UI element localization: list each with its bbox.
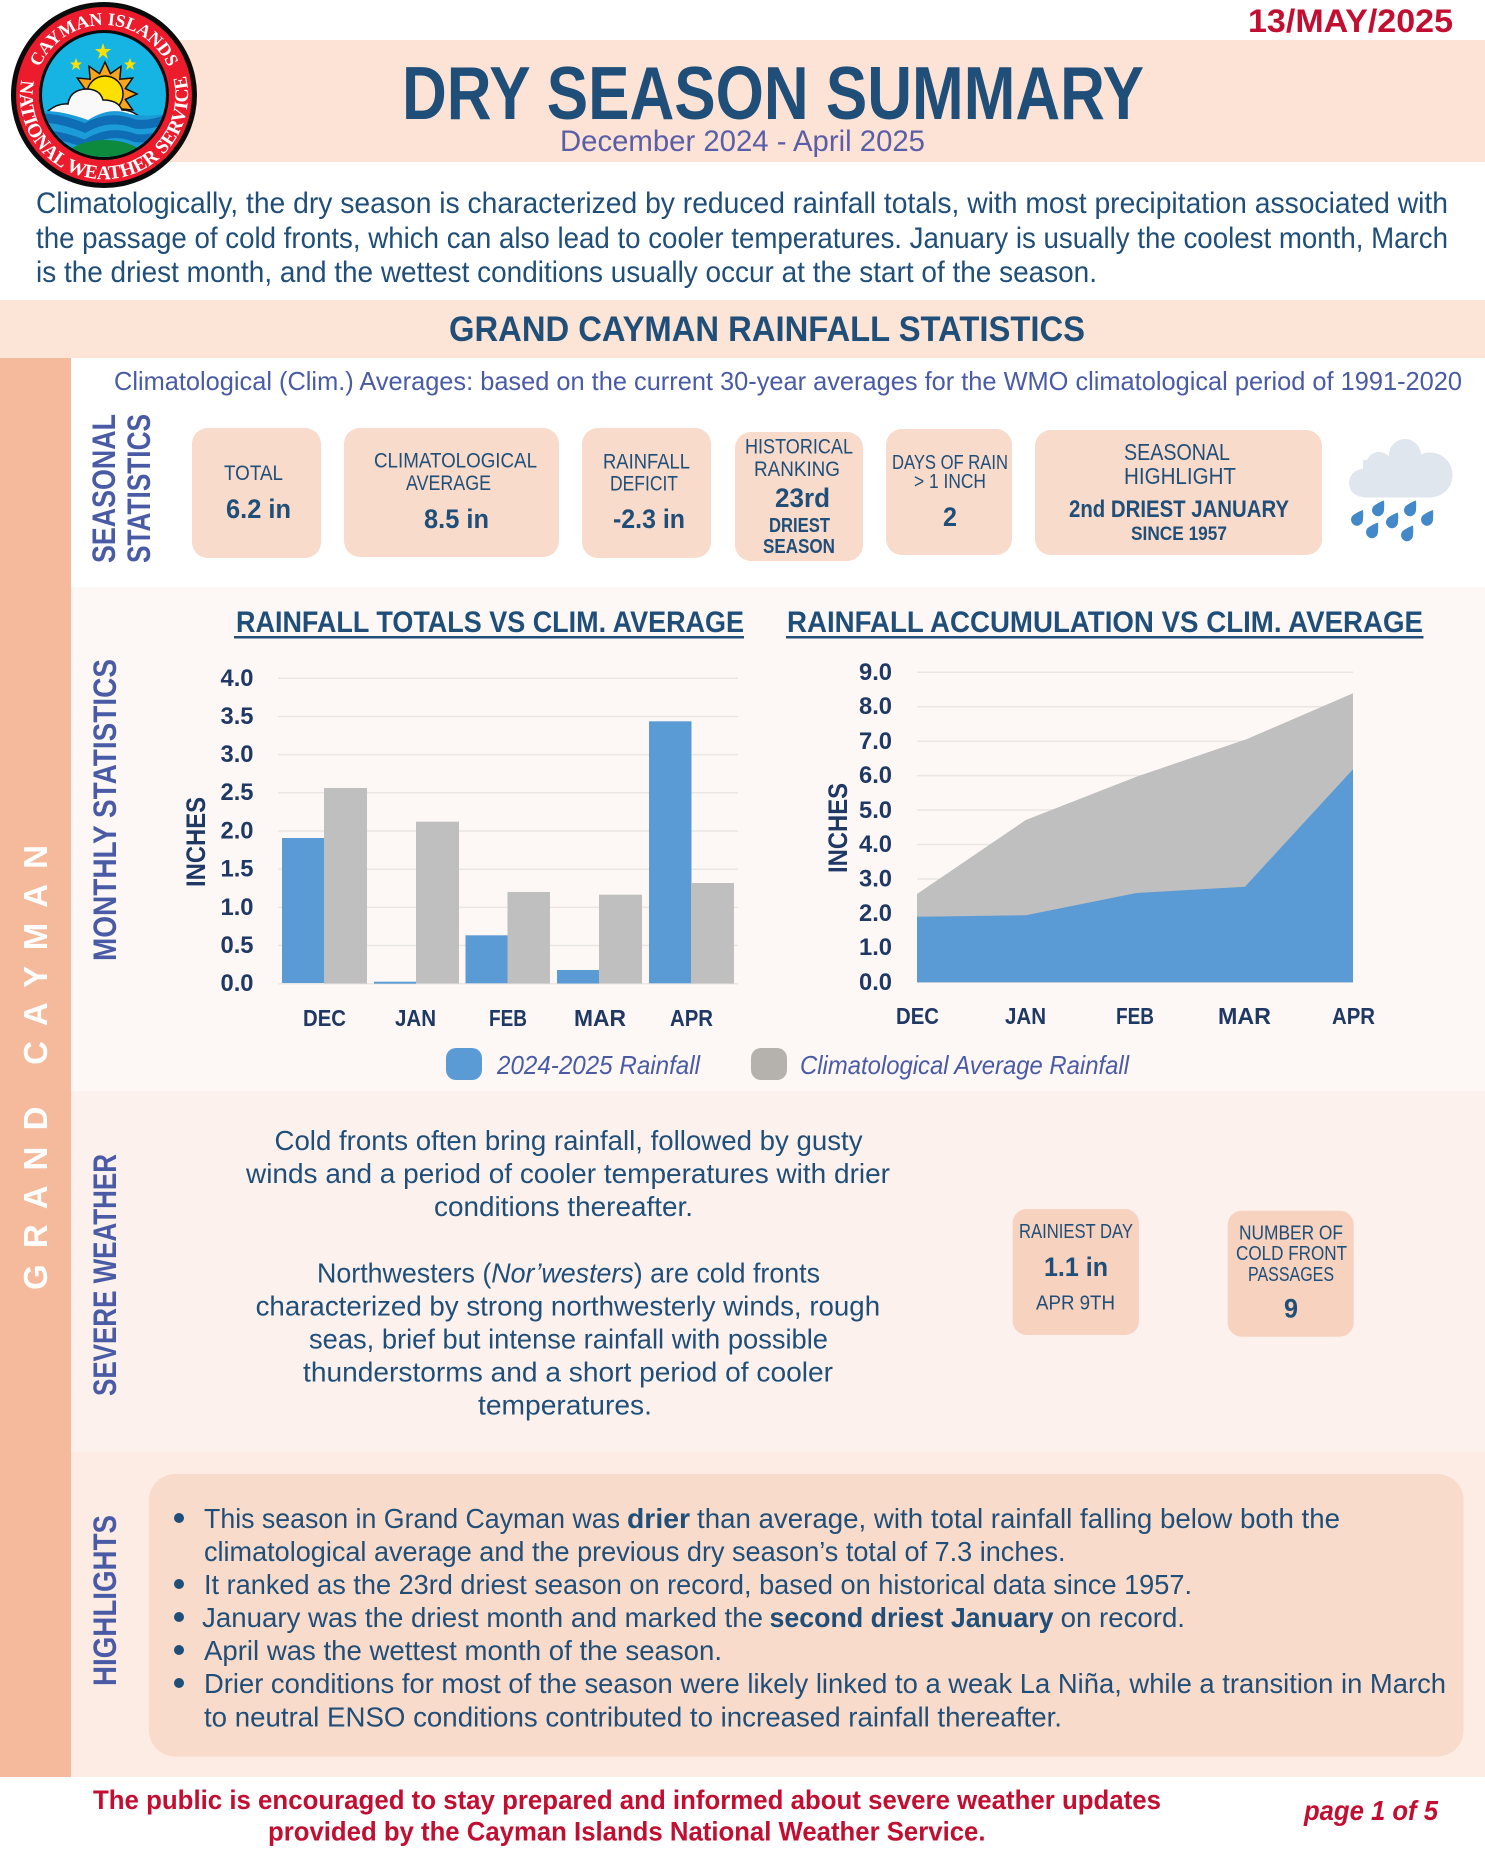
footer message <box>93 1785 1161 1847</box>
icon: rain cloud <box>1349 439 1452 541</box>
stat card: historical ranking: 23rd <box>775 483 830 513</box>
stat card: seasonal highlight: SEASONAL <box>1124 439 1230 465</box>
panel: highlights list: drier <box>627 1503 690 1534</box>
label: severe weather: SEVERE WEATHER <box>87 1154 123 1396</box>
area chart: rainfall accumulation vs climatological average: JAN <box>1005 1003 1046 1029</box>
panel: monthly statistics background <box>71 587 1485 1091</box>
stat card: days of rain: 2 <box>943 502 957 532</box>
label: seasonal statistics: STATISTICS <box>121 414 157 563</box>
panel: highlights list: January was the driest month and marked the <box>202 1602 763 1633</box>
panel: highlights list: to neutral ENSO conditions contributed to increased rainfall thereafter. <box>204 1702 1062 1733</box>
bar chart: rainfall totals vs climatological average: INCHES <box>181 797 211 887</box>
side strip: Grand Cayman <box>0 358 71 1777</box>
area chart: rainfall accumulation vs climatological average: FEB <box>1116 1003 1154 1029</box>
panel: highlights list: This season in Grand Cayman was <box>204 1503 620 1534</box>
panel: highlights list: than average, with total rainfall falling below both the <box>697 1503 1340 1534</box>
stat card: cold front passages: COLD FRONT <box>1236 1243 1347 1265</box>
stat card: historical ranking: SEASON <box>763 536 835 558</box>
stat card: cold front passages <box>1228 1211 1354 1337</box>
stat card: total: 6.2 in <box>226 494 291 524</box>
label: highlights: HIGHLIGHTS <box>87 1515 123 1686</box>
heading: Grand Cayman rainfall statistics: GRAND CAYMAN RAINFALL STATISTICS <box>449 310 1085 349</box>
panel: highlights list: Drier conditions for most of the season were likely linked to a weak La Niña, while a transition in March <box>204 1668 1446 1699</box>
legend: 2024-2025 rainfall: 2024-2025 Rainfall <box>496 1050 701 1080</box>
stat card: cold front passages: NUMBER OF <box>1239 1222 1343 1244</box>
icon: Cayman Islands National Weather Service logo: NATIONAL WEATHER SERVICE <box>20 76 188 180</box>
panel: highlights background <box>71 1452 1485 1777</box>
footer message: The public is encouraged to stay prepared and informed about severe weather updates <box>93 1785 1161 1815</box>
stat card: climatological average: AVERAGE <box>406 472 491 495</box>
stat card: seasonal highlight: SINCE 1957 <box>1131 524 1227 545</box>
text: northwesters explanation: seas, brief but intense rainfall with possible <box>309 1324 828 1354</box>
bar chart: rainfall totals vs climatological average: FEB <box>489 1005 527 1031</box>
panel: highlights list: on record. <box>1061 1602 1185 1633</box>
bar chart: rainfall totals vs climatological average <box>181 665 738 1031</box>
stat card: historical ranking <box>735 432 863 561</box>
date stamp: 13/MAY/2025 <box>1248 3 1453 39</box>
side strip: Grand Cayman: G R A N D C A Y M A N <box>17 845 54 1290</box>
legend: climatological average rainfall: Climatological Average Rainfall <box>800 1050 1130 1080</box>
area chart: rainfall accumulation vs climatological average: MAR <box>1218 1003 1271 1029</box>
stat card: seasonal highlight: 2nd DRIEST JANUARY <box>1069 496 1289 523</box>
label: seasonal statistics <box>86 414 157 563</box>
bar chart: rainfall totals vs climatological average: 0.0 <box>220 970 254 997</box>
stat card: historical ranking: DRIEST <box>769 515 830 537</box>
title: DRY SEASON SUMMARY <box>402 51 1144 135</box>
area chart: rainfall accumulation vs climatological average: 5.0 <box>859 797 892 824</box>
label: monthly statistics: MONTHLY STATISTICS <box>87 659 123 961</box>
bar chart: rainfall totals vs climatological average: 2.0 <box>220 818 254 844</box>
panel: highlights list: climatological average and the previous dry season’s total of 7.3 inches. <box>204 1536 1066 1567</box>
stat card: seasonal highlight <box>1035 430 1322 555</box>
area chart: rainfall accumulation vs climatological average: 0.0 <box>859 969 892 996</box>
stat card: cold front passages: 9 <box>1284 1294 1298 1324</box>
stat card: rainiest day: 1.1 in <box>1044 1252 1108 1282</box>
area chart: rainfall accumulation vs climatological average: APR <box>1332 1003 1375 1029</box>
area chart: rainfall accumulation vs climatological average: 8.0 <box>859 693 892 720</box>
text: northwesters explanation: characterized by strong northwesterly winds, rough <box>256 1290 880 1322</box>
area chart: rainfall accumulation vs climatological average: INCHES <box>823 783 853 873</box>
stat card: climatological average: CLIMATOLOGICAL <box>374 450 537 472</box>
area chart: rainfall accumulation vs climatological average: 1.0 <box>859 934 892 961</box>
bar chart: rainfall totals vs climatological average: JAN <box>395 1005 436 1031</box>
panel: severe weather background <box>71 1091 1485 1452</box>
panel: highlights list: April was the wettest month of the season. <box>204 1635 722 1666</box>
panel: highlights list: second driest January <box>770 1602 1054 1633</box>
stat card: days of rain: DAYS OF RAIN <box>892 452 1008 474</box>
chart heading: rainfall totals: RAINFALL TOTALS VS CLIM. AVERAGE <box>236 606 744 639</box>
text: northwesters explanation: Northwesters (Nor’westers) are cold fronts <box>317 1258 820 1288</box>
area chart: rainfall accumulation vs climatological average: 2.0 <box>859 900 892 927</box>
stat card: total: TOTAL <box>224 462 283 485</box>
stat card: rainfall deficit: RAINFALL <box>603 450 690 474</box>
stat card: days of rain: > 1 INCH <box>914 471 986 493</box>
climatological averages note: Climatological (Clim.) Averages: based on the current 30-year averages for the WMO climatological period of 1991-2020 <box>114 366 1462 396</box>
intro text: is the driest month, and the wettest conditions usually occur at the start of the season. <box>36 256 1097 289</box>
area chart: rainfall accumulation vs climatological average: 7.0 <box>859 728 892 755</box>
stat card: days of rain <box>886 429 1012 555</box>
panel: highlights list <box>149 1474 1464 1756</box>
stat card: historical ranking: RANKING <box>754 458 840 481</box>
subtitle: December 2024 - April 2025 <box>560 125 925 158</box>
stat card: seasonal highlight: HIGHLIGHT <box>1124 463 1236 489</box>
area chart: rainfall accumulation vs climatological average: 9.0 <box>859 659 892 686</box>
footer message: provided by the Cayman Islands National Weather Service. <box>268 1817 986 1847</box>
chart heading: rainfall accumulation: RAINFALL ACCUMULATION VS CLIM. AVERAGE <box>787 606 1423 639</box>
panel: highlights list: It ranked as the 23rd driest season on record, based on historical data since 1957. <box>204 1569 1192 1600</box>
text: cold fronts explanation: conditions thereafter. <box>434 1191 693 1222</box>
text: northwesters explanation <box>256 1258 880 1420</box>
area chart: rainfall accumulation vs climatological average: 6.0 <box>859 762 892 789</box>
icon: Cayman Islands National Weather Service logo <box>11 2 197 188</box>
stat card: climatological average: 8.5 in <box>424 504 489 534</box>
intro text <box>36 187 1448 289</box>
text: cold fronts explanation: Cold fronts often bring rainfall, followed by gusty <box>274 1125 862 1156</box>
stat card: rainiest day <box>1013 1209 1139 1335</box>
bar chart: rainfall totals vs climatological average: MAR <box>574 1005 626 1031</box>
area chart: rainfall accumulation vs climatological average: 4.0 <box>859 831 892 858</box>
area chart: rainfall accumulation vs climatological average <box>823 659 1375 1029</box>
bar chart: rainfall totals vs climatological average: APR <box>670 1005 713 1031</box>
area chart: rainfall accumulation vs climatological average: DEC <box>896 1003 939 1029</box>
panel: header band <box>120 40 1485 162</box>
stat card: rainiest day: APR 9TH <box>1036 1292 1115 1314</box>
bar chart: rainfall totals vs climatological average: 0.5 <box>220 932 254 959</box>
panel: section heading band <box>0 300 1485 358</box>
stat card: rainfall deficit: -2.3 in <box>613 504 685 534</box>
stat card: rainfall deficit <box>582 428 711 558</box>
stat card: historical ranking: HISTORICAL <box>745 436 853 458</box>
text: northwesters explanation: thunderstorms and a short period of cooler <box>303 1356 833 1388</box>
text: cold fronts explanation: winds and a period of cooler temperatures with drier <box>245 1158 890 1189</box>
icon: Cayman Islands National Weather Service logo: CAYMAN ISLANDS <box>31 13 178 66</box>
label: seasonal statistics: SEASONAL <box>86 414 122 563</box>
bar chart: rainfall totals vs climatological average: 1.0 <box>220 894 254 921</box>
page number: page 1 of 5 <box>1303 1795 1438 1826</box>
bar chart: rainfall totals vs climatological average: DEC <box>303 1005 346 1031</box>
area chart: rainfall accumulation vs climatological average: 3.0 <box>859 866 892 892</box>
bar chart: rainfall totals vs climatological average: 4.0 <box>220 665 254 692</box>
bar chart: rainfall totals vs climatological average: 1.5 <box>220 856 254 882</box>
stat card: rainfall deficit: DEFICIT <box>610 472 678 496</box>
bar chart: rainfall totals vs climatological average: 3.0 <box>220 741 254 768</box>
bar chart: rainfall totals vs climatological average: 2.5 <box>220 779 254 806</box>
bar chart: rainfall totals vs climatological average: 3.5 <box>220 703 254 730</box>
text: northwesters explanation: temperatures. <box>478 1390 652 1420</box>
stat card: rainiest day: RAINIEST DAY <box>1019 1221 1133 1243</box>
stat card: cold front passages: PASSAGES <box>1248 1264 1334 1286</box>
text: cold fronts explanation <box>245 1125 890 1222</box>
stat card: total <box>192 428 321 558</box>
stat card: climatological average <box>344 428 559 557</box>
